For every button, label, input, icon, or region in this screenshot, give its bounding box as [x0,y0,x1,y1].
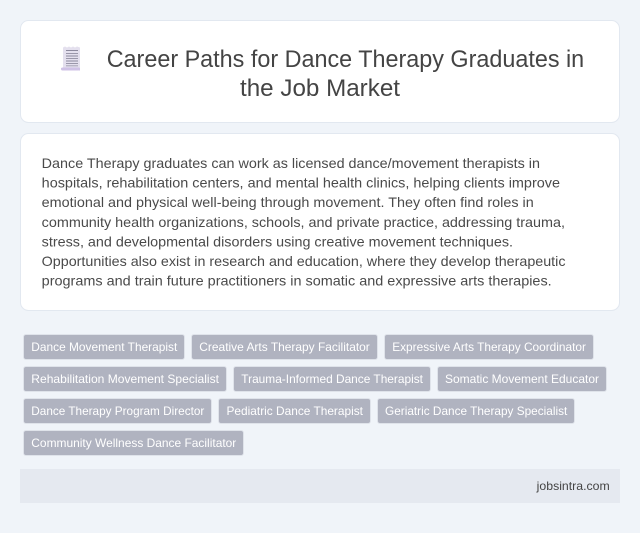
tag: Expressive Arts Therapy Coordinator: Expressive Arts Therapy Coordinator [392,340,586,354]
tag: Creative Arts Therapy Facilitator: Creative Arts Therapy Facilitator [199,340,370,354]
tag: Pediatric Dance Therapist: Pediatric Dance Therapist [226,404,364,418]
tag: Community Wellness Dance Facilitator: Community Wellness Dance Facilitator [31,436,236,450]
tag: Somatic Movement Educator [438,366,606,392]
text block: description: hospitals, rehabilitation centers, and mental health clinics, helping clients improve [42,175,560,191]
title: Career Paths for Dance Therapy Graduates in [107,46,584,73]
tag: Community Wellness Dance Facilitator [24,430,244,456]
tag: Creative Arts Therapy Facilitator [192,334,378,360]
tag list: career paths [24,334,606,456]
footer bar [20,469,620,503]
tag: Trauma-Informed Dance Therapist [234,366,430,392]
panel: header card [20,20,620,122]
tag: Rehabilitation Movement Specialist [24,366,226,392]
icon: document scroll [61,46,80,70]
tag: Expressive Arts Therapy Coordinator [384,334,594,360]
tag: Geriatric Dance Therapy Specialist [378,398,574,424]
tag: Trauma-Informed Dance Therapist: Trauma-Informed Dance Therapist [241,372,424,386]
tag: Pediatric Dance Therapist [218,398,370,424]
tag: Somatic Movement Educator: Somatic Movement Educator [445,372,599,386]
text block: description: programs and train future practitioners in somatic and expressive arts therapies. [42,273,552,289]
tag: Dance Movement Therapist [24,334,184,360]
title: the Job Market [240,75,400,102]
text block: description: emotional and physical well-being through movement. They often find roles in [42,194,534,210]
panel: description card [20,134,620,310]
tag: Dance Therapy Program Director [24,398,212,424]
text block: description: stress, and developmental disorders using creative movement techniques. [42,233,513,249]
footer text: source: jobsintra.com [536,479,610,493]
tag: Rehabilitation Movement Specialist: Rehabilitation Movement Specialist [31,372,220,386]
title [107,46,584,102]
tag: Dance Therapy Program Director: Dance Therapy Program Director [31,404,204,418]
text block: description: Opportunities also exist in research and education, where they develop therapeutic [42,253,565,269]
text block: description [42,155,565,289]
tag: Dance Movement Therapist: Dance Movement Therapist [31,340,178,354]
text block: description: community health organizations, schools, and private practice, addressing trauma, [42,214,565,230]
text block: description: Dance Therapy graduates can work as licensed dance/movement therapists in [42,155,540,171]
tag: Geriatric Dance Therapy Specialist: Geriatric Dance Therapy Specialist [385,404,568,418]
